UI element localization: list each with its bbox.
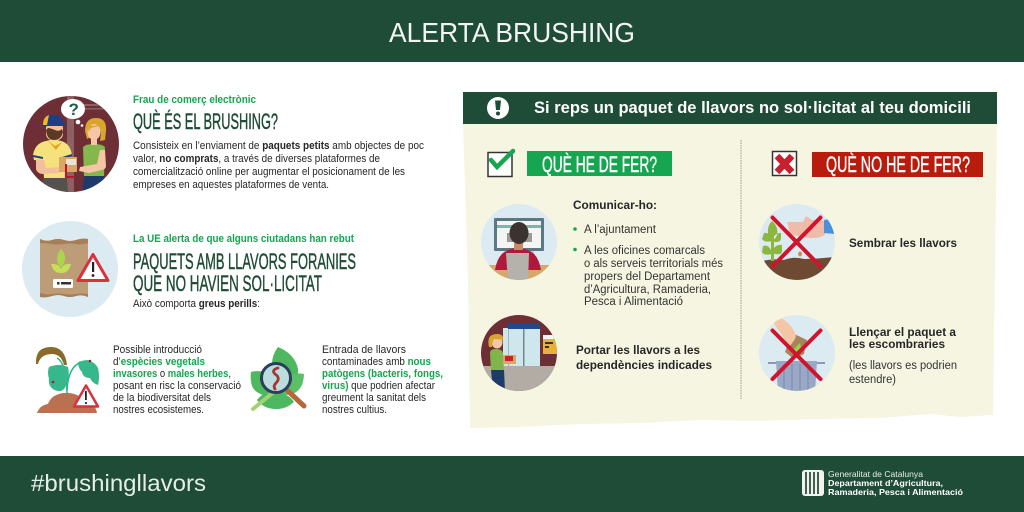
- text block: new pathogens risk: Entrada de llavors: [322, 344, 406, 356]
- footer band: [0, 456, 1024, 512]
- logo: Generalitat shield: [802, 470, 824, 496]
- text block: take seeds to the offices: dependències indicades: [576, 358, 712, 372]
- bullet list: A l’ajuntament: [584, 224, 657, 236]
- text block: new pathogens risk: contaminades amb nous: [322, 356, 431, 368]
- text block: report it: [573, 200, 723, 308]
- title: ALERTA BRUSHING: [389, 17, 635, 48]
- text block: new pathogens risk: [322, 344, 443, 416]
- text block: invasive species risk: Possible introducció: [113, 344, 202, 356]
- logo text: Ramaderia, Pesca i Alimentació: [828, 487, 963, 497]
- text block: do not throw away: estendre): [849, 374, 896, 386]
- text block: do not throw away: [849, 327, 957, 386]
- bullet list: Pesca i Alimentació: [584, 296, 683, 308]
- text block: invasive species risk: posant en risc la conservació: [113, 380, 241, 392]
- bullet list: propers del Departament: [584, 271, 711, 283]
- text block: invasive species risk: [113, 344, 241, 416]
- text block: do not throw away: les escombraries: [849, 339, 945, 351]
- panel title: Si reps un paquet de llavors no sol·licitat al teu domicili: [534, 99, 971, 117]
- paragraph: empreses en aquestes plataformes de venta.: [133, 179, 329, 191]
- text block: new pathogens risk: virus) que podrien afectar: [322, 380, 435, 392]
- text block: do not throw away: (les llavors es podrien: [849, 360, 957, 372]
- paragraph: [133, 140, 424, 191]
- bullet list: A les oficines comarcals: [584, 245, 705, 257]
- icon: person at computer: [481, 204, 557, 283]
- text block: EU alert: La UE alerta de que alguns ciutadans han rebut: [133, 233, 354, 245]
- header band: [0, 0, 1024, 62]
- logo text: Generalitat de Catalunya: [828, 469, 923, 479]
- icon: red X box: [772, 152, 796, 176]
- icon: throwing packet in bin crossed out: [759, 315, 835, 393]
- text block: invasive species risk: invasores o males herbes,: [113, 368, 231, 380]
- text block: new pathogens risk: nostres cultius.: [322, 404, 387, 416]
- text block: take seeds to the offices: [576, 343, 712, 372]
- text block: do not sow: Sembrar les llavors: [849, 238, 957, 250]
- heading: què és el brushing: QUÈ ÉS EL BRUSHING?: [133, 109, 278, 134]
- heading: what should I do: [527, 151, 672, 177]
- subheading: Això comporta greus perills:: [133, 298, 260, 310]
- text block: what is brushing: [133, 94, 424, 191]
- icon: leaves under magnifying glass: [251, 347, 304, 409]
- icon: thought bubble with question mark: ?: [68, 100, 79, 119]
- heading: unsolicited seed packets: QUE NO HAVIEN SOL·LICITAT: [133, 271, 322, 296]
- heading: unsolicited seed packets: PAQUETS AMB LLAVORS FORANIES: [133, 249, 356, 274]
- text block: invasive species risk: d’espècies vegetals: [113, 356, 205, 368]
- text block: new pathogens risk: greument la sanitat dels: [322, 392, 426, 404]
- bullet list: [573, 224, 723, 308]
- heading: unsolicited seed packets: [133, 249, 356, 296]
- text block: invasive species risk: de la biodiversitat dels: [113, 392, 211, 404]
- panel: what to do if you receive a packet: [463, 92, 997, 428]
- bullet list: d’Agricultura, Ramaderia,: [584, 284, 711, 296]
- panel header: [463, 92, 997, 124]
- icon: green check box: [488, 151, 513, 176]
- icon: sowing seeds crossed out: [759, 204, 835, 281]
- paragraph: Consisteix en l’enviament de paquets petits amb objectes de poc: [133, 140, 424, 152]
- logo text: [828, 469, 963, 497]
- heading: what should I do: QUÈ HE DE FER?: [542, 152, 657, 177]
- text block: new pathogens risk: patògens (bacteris, fongs,: [322, 368, 443, 380]
- icon: seed bag with warning: [22, 221, 118, 317]
- text block: do not throw away: Llençar el paquet a: [849, 327, 957, 339]
- logo text: Departament d’Agricultura,: [828, 478, 943, 488]
- text block: take seeds to the offices: Portar les llavors a les: [576, 343, 700, 357]
- icon: exclamation: [487, 97, 509, 119]
- hashtag: #brushingllavors: [31, 470, 206, 496]
- bullet list: o als serveis territorials més: [584, 258, 723, 270]
- paragraph: valor, no comprats, a través de diverses plataformes de: [133, 153, 380, 165]
- text block: EU alert: [133, 233, 356, 310]
- paragraph: comercialització online per augmentar el posicionament de les: [133, 166, 405, 178]
- icon: woman carrying seeds to office: [481, 315, 557, 391]
- icon: courier delivering a parcel: [23, 96, 120, 193]
- text block: what is brushing: Frau de comerç electrònic: [133, 94, 256, 106]
- text block: invasive species risk: nostres ecosistemes.: [113, 404, 204, 416]
- icon: withered plant with warning: [36, 347, 99, 413]
- icon: thought bubble with question mark: [61, 99, 85, 127]
- text block: report it: Comunicar-ho:: [573, 200, 657, 212]
